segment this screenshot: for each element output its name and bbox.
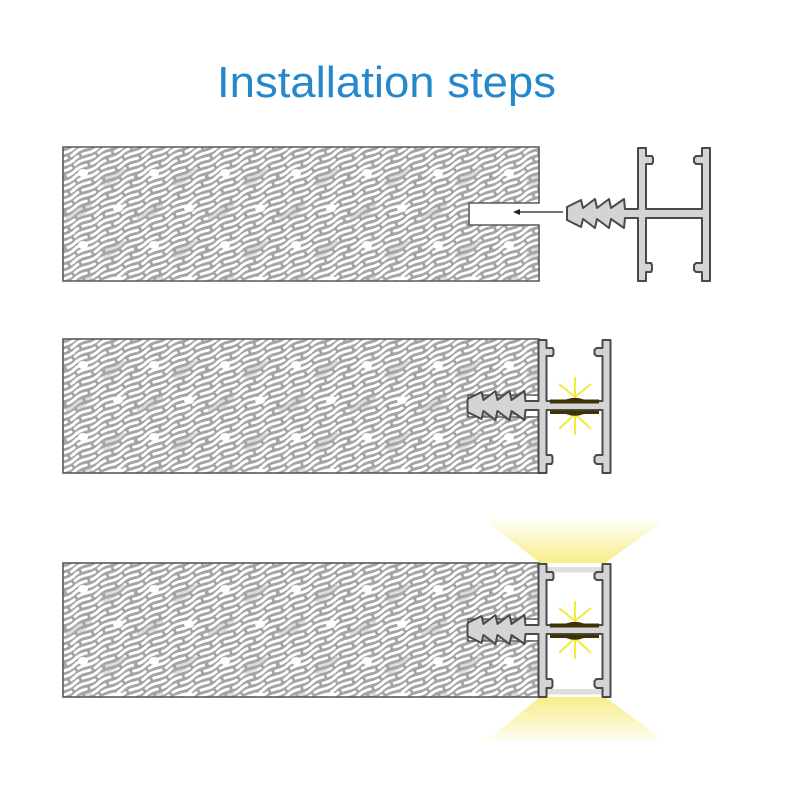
step 2: profile inserted in wall with LED strip — [63, 339, 610, 473]
slot outline — [468, 395, 539, 417]
wall panel — [63, 563, 539, 697]
title: Installation steps — [217, 58, 556, 107]
bottom light glow — [485, 697, 667, 742]
step 3: profile with diffusers and light glow — [63, 520, 667, 742]
wall panel — [63, 339, 539, 473]
inserted profile — [468, 340, 610, 473]
LED strip with light rays — [550, 601, 599, 659]
wall panel with slot — [63, 147, 539, 281]
top light glow — [485, 520, 665, 563]
aluminium profile — [567, 148, 710, 281]
bottom diffuser cover — [546, 689, 604, 694]
LED strip with light rays — [550, 377, 599, 435]
inserted profile — [468, 564, 610, 697]
slot opening beside profile — [525, 396, 538, 416]
slot outline — [468, 619, 539, 641]
top diffuser cover — [546, 567, 604, 572]
arrow — [513, 209, 563, 215]
step 1: wall panel, arrow and separate profile — [63, 147, 710, 281]
slot opening beside profile — [525, 620, 538, 640]
